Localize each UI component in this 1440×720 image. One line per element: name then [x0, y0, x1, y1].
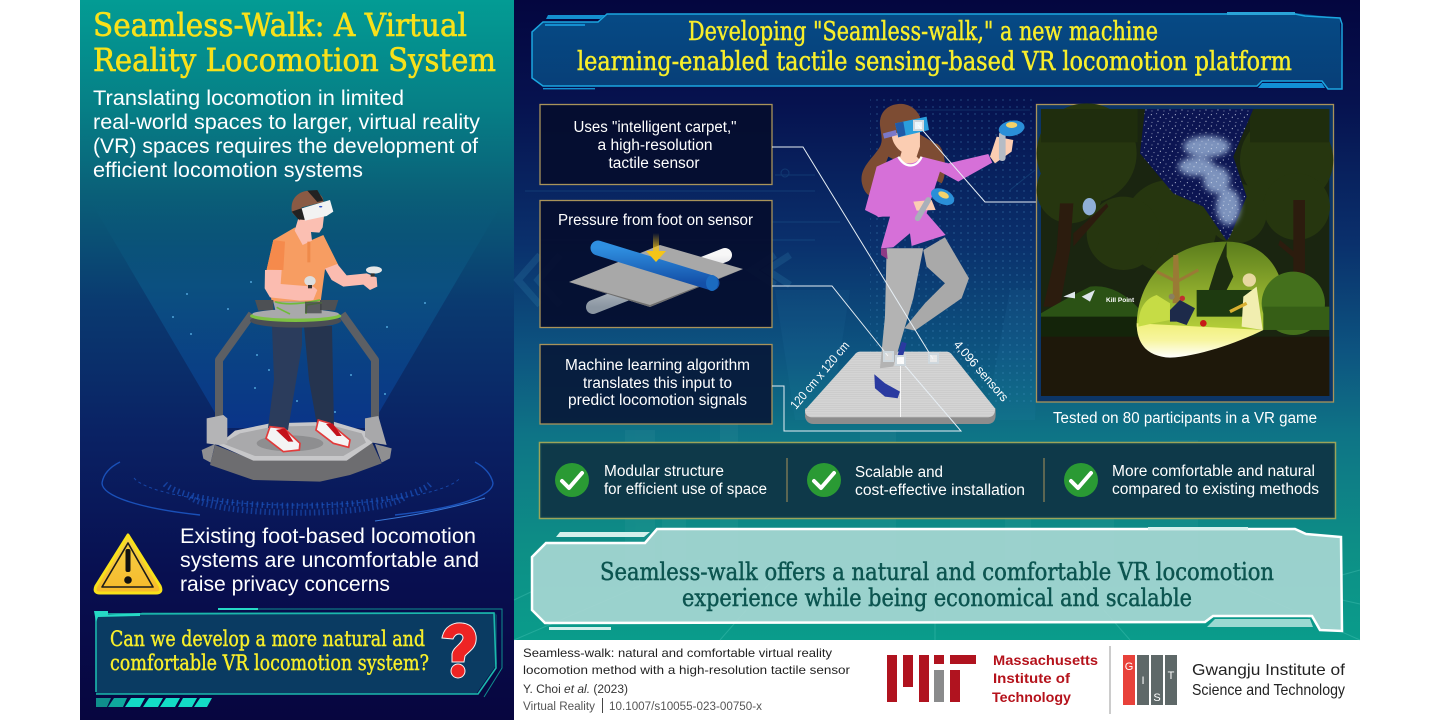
- question text: comfortable VR locomotion system?: [110, 651, 429, 675]
- lit dome: [1137, 242, 1279, 330]
- footer: citation: Y. Choi et al. (2023): [523, 684, 628, 696]
- text: intro paragraph: efficient locomotion systems: [93, 159, 363, 182]
- mat labels: 120 cm x 120 cm: [788, 339, 852, 412]
- sparkle stars: [172, 281, 426, 413]
- title: left: [93, 6, 496, 79]
- VR headset: [895, 117, 929, 137]
- heading text: learning-enabled tactile sensing-based VR locomotion platform: [577, 47, 1292, 77]
- MIT mark: [887, 655, 976, 702]
- trunks: [1043, 200, 1305, 307]
- right hand and controller: [990, 137, 1013, 163]
- benefit 3: compared to existing methods: [1112, 481, 1319, 498]
- footer: citation: Virtual Reality: [523, 701, 595, 713]
- legs: [268, 326, 302, 430]
- conclusion text: Seamless-walk offers a natural and comfortable VR locomotion: [600, 558, 1274, 586]
- light cone: [84, 190, 510, 428]
- mat labels: [788, 338, 1011, 412]
- in-game label: Kill Point: [1106, 297, 1135, 304]
- heading text: Developing "Seamless-walk," a new machine: [688, 17, 1158, 47]
- box heading: Pressure from foot on sensor: [558, 212, 753, 229]
- benefit 3: More comfortable and natural: [1112, 463, 1315, 480]
- panel: machine learning box: [540, 344, 772, 424]
- GIST wordmark: [1192, 662, 1346, 699]
- box text: a high-resolution: [598, 137, 712, 154]
- box text: tactile sensor: [608, 155, 700, 172]
- collar: [898, 157, 922, 165]
- conclusion text: [600, 558, 1274, 612]
- GIST mark: I: [1141, 675, 1145, 687]
- icon: question mark: [442, 623, 476, 678]
- right bush: [1262, 272, 1325, 335]
- text: intro paragraph: Translating locomotion in limited: [93, 87, 404, 110]
- box text: translates this input to: [583, 375, 732, 392]
- stars: [1140, 109, 1253, 241]
- sneakers: [266, 420, 350, 452]
- treadmill frame: [219, 314, 375, 420]
- face and neck: [892, 132, 923, 163]
- in-game characters: [1170, 300, 1195, 325]
- shrubs and ground: [1041, 286, 1140, 320]
- MIT wordmark: Technology: [992, 689, 1071, 705]
- title: left: Reality Locomotion System: [93, 41, 496, 79]
- logo: MIT: [887, 652, 1098, 705]
- footer: citation: Seamless-walk: natural and comfortable virtual reality: [523, 646, 832, 660]
- GIST mark: S: [1153, 692, 1161, 704]
- box text: [574, 119, 736, 172]
- night sky: [1140, 109, 1253, 241]
- GIST mark: G: [1125, 661, 1133, 673]
- text: existing systems problem: Existing foot-based locomotion: [180, 525, 476, 548]
- dot grid: [870, 95, 1035, 405]
- question text: Can we develop a more natural and: [110, 627, 425, 651]
- text: existing systems problem: [180, 525, 479, 596]
- white creature: [1083, 198, 1096, 215]
- box text: Machine learning algorithm: [565, 357, 750, 374]
- heading text: [577, 17, 1292, 77]
- panel: benefits: [540, 442, 1336, 518]
- footer: citation: [523, 646, 850, 713]
- conclusion text: experience while being economical and scalable: [682, 584, 1192, 612]
- text: intro paragraph: [93, 87, 481, 182]
- question text: [110, 627, 429, 675]
- photo: VR game screenshot: [1036, 103, 1334, 402]
- faint circuit: [525, 110, 1035, 240]
- illustration: man on VR treadmill: [202, 190, 392, 482]
- box text: Uses "intelligent carpet,": [574, 119, 736, 136]
- benefit 1: Modular structure: [604, 463, 724, 480]
- lit floor: [1137, 323, 1263, 358]
- upper body: [250, 190, 382, 328]
- connector lines: [772, 125, 1036, 431]
- heading box: main heading: [532, 12, 1342, 89]
- hair: [861, 104, 945, 197]
- chevrons: [518, 255, 790, 305]
- GIST mark: [1123, 655, 1177, 705]
- sensor markers: [884, 121, 938, 365]
- floor rings: [102, 462, 493, 521]
- panel: pressure box: [540, 200, 772, 328]
- benefit 1: [555, 463, 767, 498]
- panel: left context: [80, 0, 514, 720]
- forest canopy: [1037, 103, 1333, 273]
- panel: right main: [514, 0, 1360, 640]
- decorative stripes: [96, 698, 212, 707]
- icon: warning triangle: [95, 535, 161, 593]
- benefit 2: cost-effective installation: [855, 482, 1025, 499]
- mat labels: 4,096 sensors: [951, 338, 1011, 404]
- title: left: Seamless-Walk: A Virtual: [93, 6, 467, 44]
- text: existing systems problem: systems are uncomfortable and: [180, 549, 479, 572]
- footer: citation: locomotion method with a high-resolution tactile sensor: [523, 663, 850, 677]
- beams: [775, 290, 850, 420]
- logo: GIST: [1123, 655, 1346, 705]
- benefit 1: for efficient use of space: [604, 481, 767, 498]
- benefit 2: Scalable and: [855, 464, 943, 481]
- MIT wordmark: Massachusetts: [993, 652, 1098, 668]
- dividers: [787, 458, 1044, 502]
- text: existing systems problem: raise privacy concerns: [180, 573, 390, 596]
- GIST wordmark: Science and Technology: [1192, 682, 1345, 699]
- sensor mat: [805, 352, 996, 424]
- perspective lines: [514, 560, 1360, 640]
- text: intro paragraph: (VR) spaces requires the development of: [93, 135, 478, 158]
- box text: [565, 357, 750, 409]
- MIT wordmark: [992, 652, 1098, 705]
- text: intro paragraph: real-world spaces to larger, virtual reality: [93, 111, 481, 134]
- sensor diagram: [569, 233, 743, 307]
- caption: tested participants: Tested on 80 participants in a VR game: [1053, 410, 1317, 427]
- footer: citation: 10.1007/s10055-023-00750-x: [609, 701, 762, 713]
- skyline: [625, 420, 1198, 560]
- illustration: woman on sensor mat: [805, 104, 1026, 424]
- box text: predict locomotion signals: [568, 392, 747, 409]
- callout: conclusion: [532, 527, 1342, 631]
- GIST mark: T: [1168, 670, 1175, 682]
- benefit 3: [1064, 463, 1319, 498]
- benefit 2: [807, 463, 1025, 499]
- callout: research question: [94, 608, 502, 707]
- GIST wordmark: Gwangju Institute of: [1192, 662, 1346, 679]
- treadmill base: [202, 415, 392, 482]
- MIT wordmark: Institute of: [993, 670, 1070, 686]
- pink top: [865, 154, 992, 248]
- left hand and controller: [913, 200, 936, 211]
- panel: intelligent carpet box: [540, 104, 772, 184]
- shoes: [874, 374, 900, 398]
- leggings: [880, 248, 923, 368]
